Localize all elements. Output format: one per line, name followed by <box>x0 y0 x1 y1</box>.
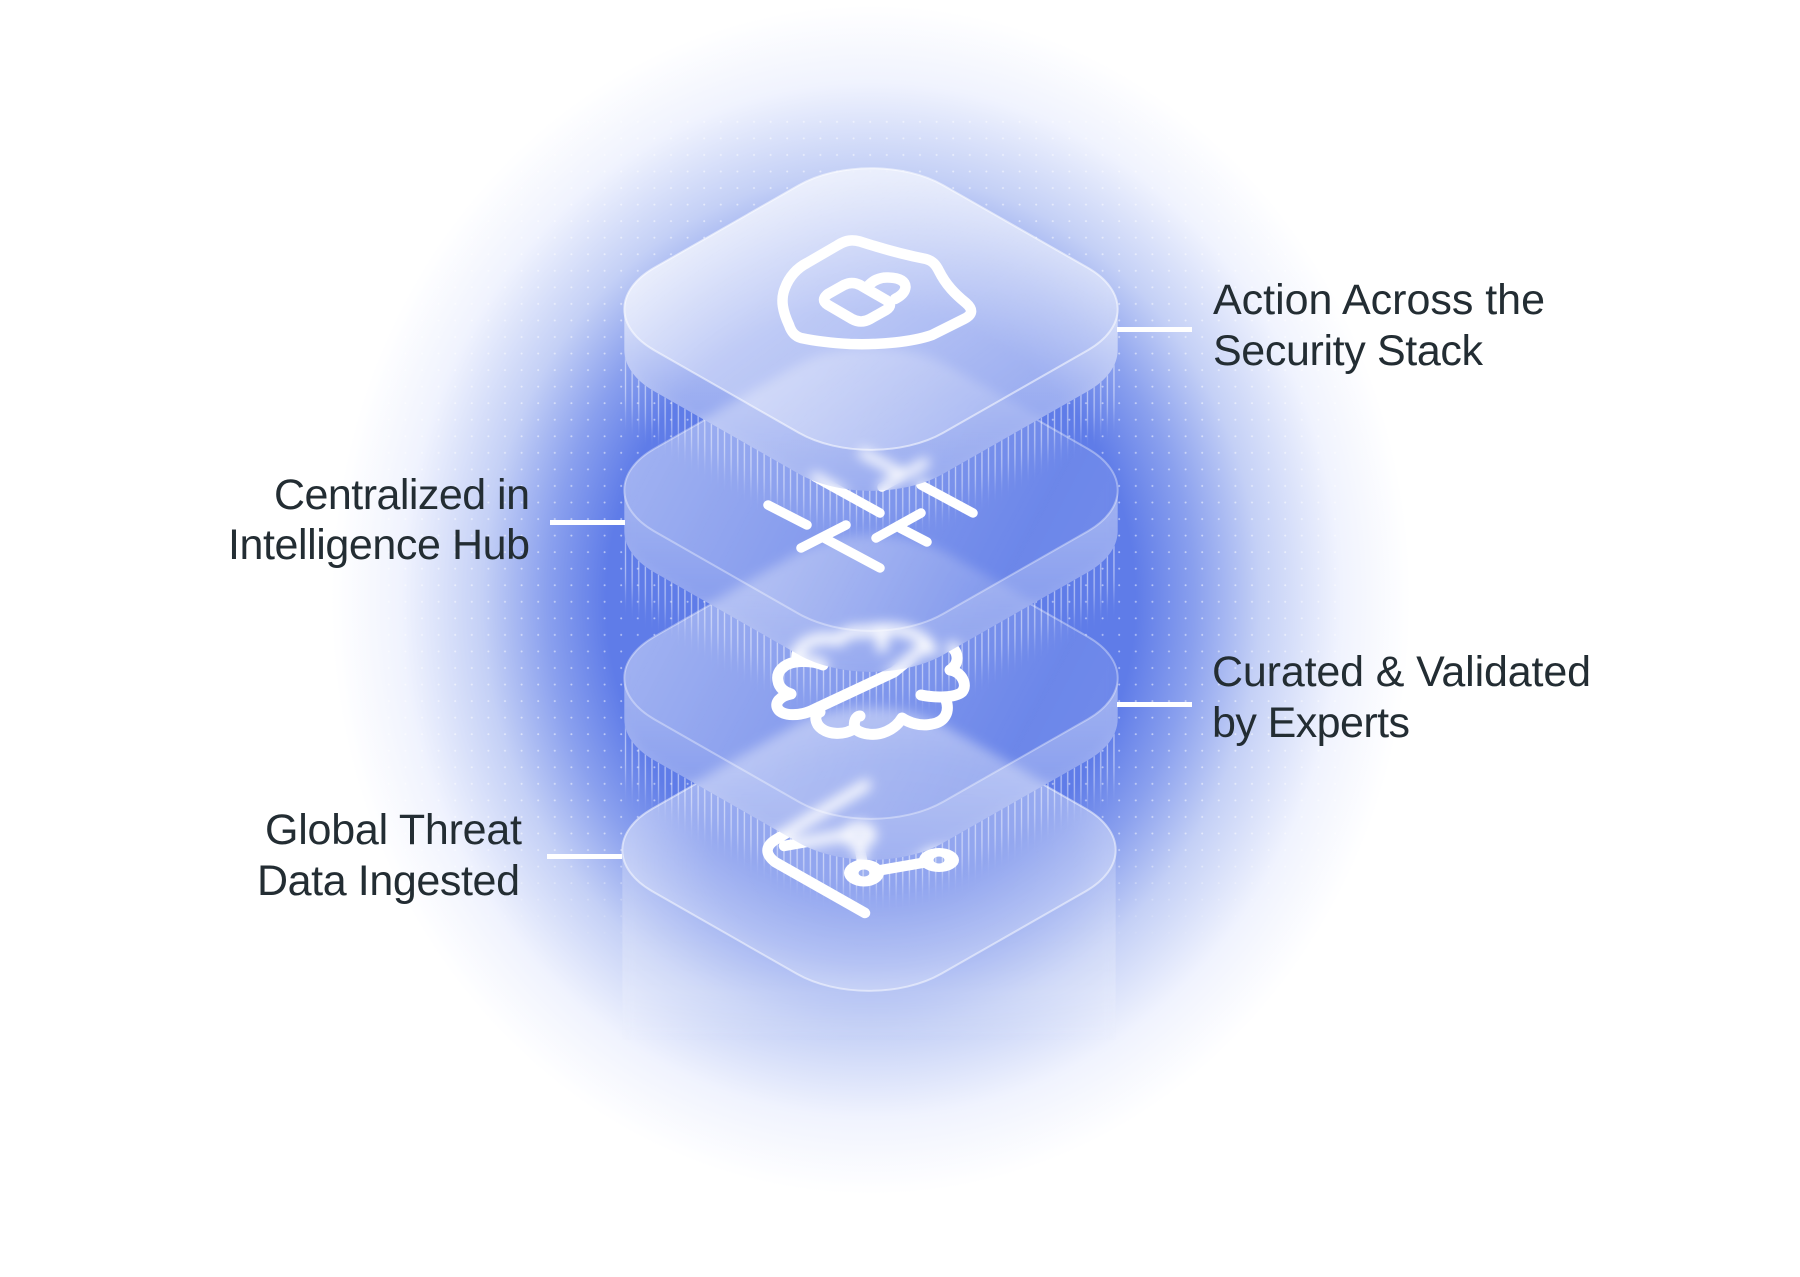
dot grid <box>405 121 1336 917</box>
panel: Curated and Validated layer <box>623 531 1119 860</box>
glass face and fading side <box>621 702 1117 1010</box>
label: Global Threat Data Ingested: Data Ingested <box>257 857 520 905</box>
label: Global Threat Data Ingested <box>257 806 522 905</box>
stripes under action layer <box>624 356 1115 532</box>
stripes under intelligence hub layer <box>624 536 1115 712</box>
label: Action Across the Security Stack: Action Across the <box>1213 276 1545 324</box>
connector: global threat label <box>547 854 622 858</box>
label: Curated and Validated by Experts: Curated & Validated <box>1212 648 1591 696</box>
connector: curated label <box>1117 702 1192 706</box>
panel: Action Across the Security Stack layer <box>623 167 1119 570</box>
connector: intelligence hub label <box>550 520 625 524</box>
panel: Global Threat Data Ingested layer <box>621 702 1117 1013</box>
frosted glass body <box>624 168 1118 492</box>
icon: shield with padlock <box>777 235 976 350</box>
label: Action Across the Security Stack <box>1213 276 1545 375</box>
icon: circuit strokes <box>763 444 978 573</box>
label: Curated and Validated by Experts <box>1212 648 1591 747</box>
frosted glass body <box>636 799 1104 934</box>
glass face and side <box>623 531 1119 860</box>
label: Global Threat Data Ingested: Global Threat <box>265 806 522 854</box>
panel: Centralized in Intelligence Hub layer <box>623 348 1119 743</box>
frosted glass body <box>632 617 1108 860</box>
label: Action Across the Security Stack: Security Stack <box>1213 327 1484 375</box>
icon: brain <box>771 616 970 740</box>
label: Centralized in Intelligence Hub: Centralized in <box>274 471 530 519</box>
glass face and side <box>623 348 1119 672</box>
stripes under curated layer <box>624 724 1115 900</box>
icon: network chevron <box>762 774 959 918</box>
label: Curated and Validated by Experts: by Experts <box>1212 699 1410 747</box>
connector: action label <box>1117 327 1192 332</box>
label: Centralized in Intelligence Hub <box>228 471 530 569</box>
glass face and side <box>623 167 1119 491</box>
label: Centralized in Intelligence Hub: Intelligence Hub <box>228 521 530 569</box>
frosted glass body <box>632 420 1114 672</box>
